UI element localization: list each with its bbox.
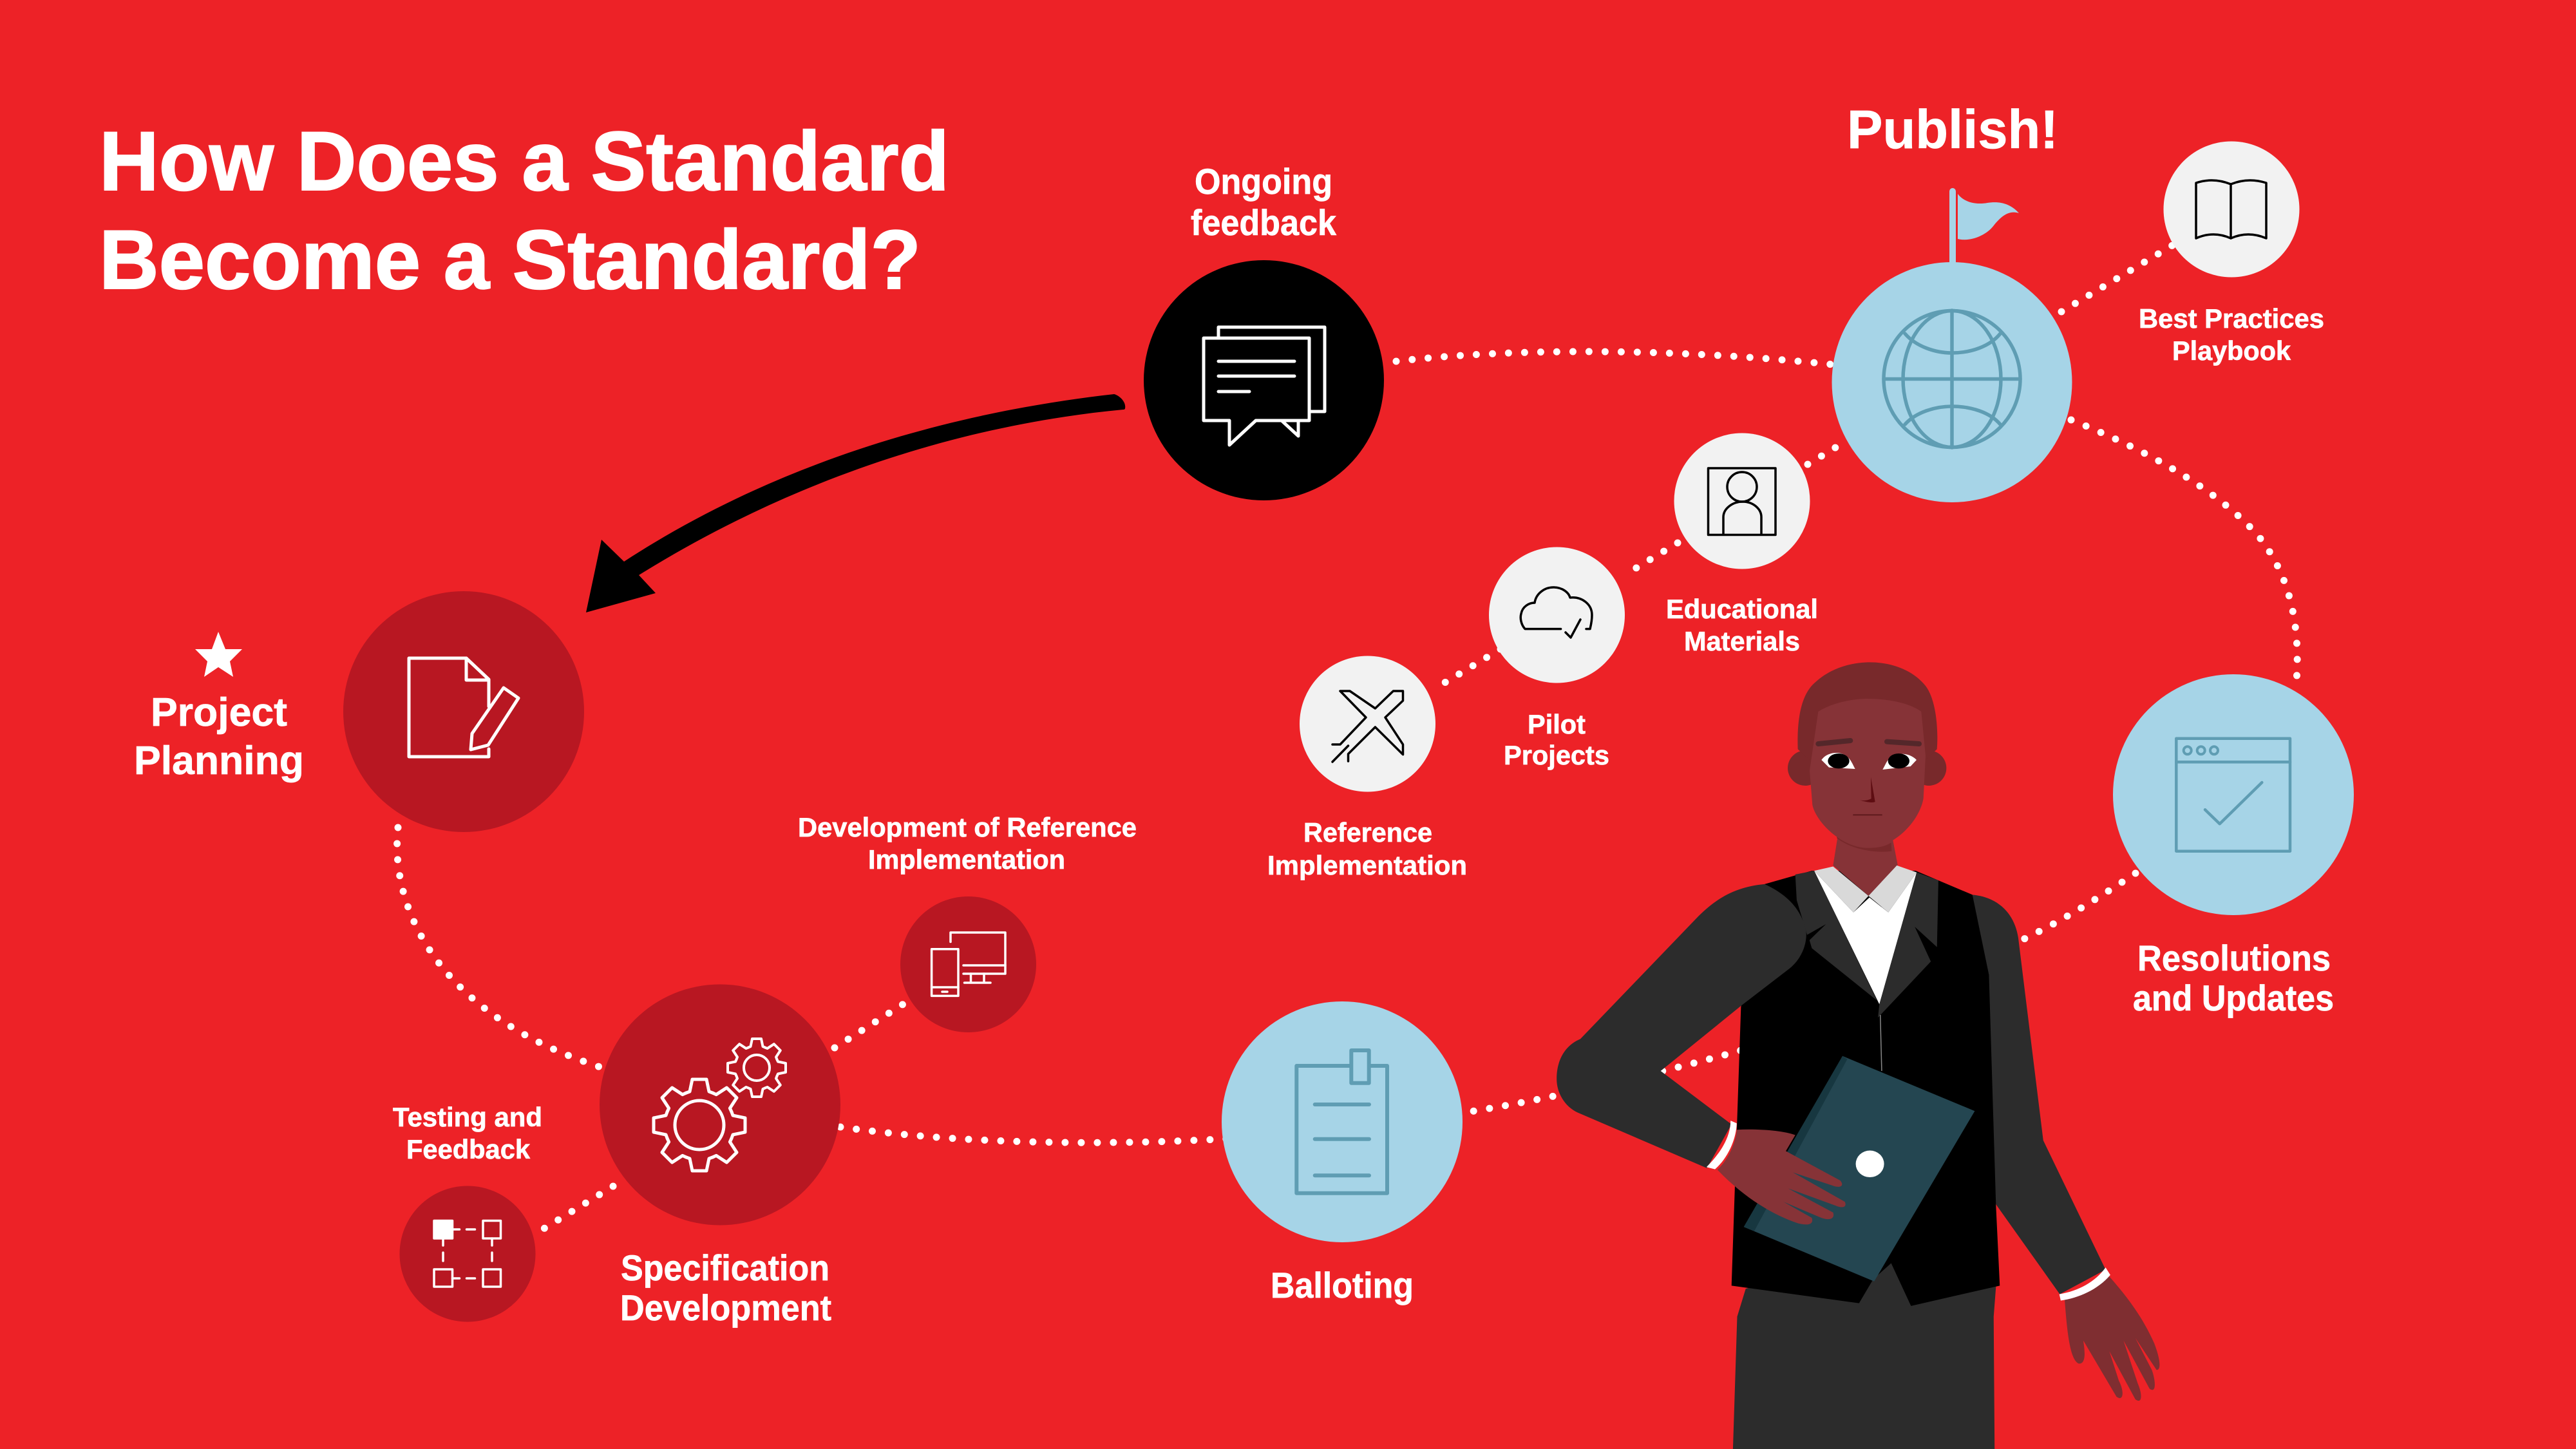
label: reference implementation: Reference [1303,817,1432,848]
label: pilot projects [1504,709,1609,770]
icon: browser window with check [2176,739,2290,851]
label: development of reference implementation: Development of Reference [798,812,1137,842]
label: project planning [134,690,304,783]
label: educational materials: Materials [1684,626,1800,656]
label: project planning: Project [151,690,287,735]
label: ongoing feedback: Ongoing [1195,161,1332,202]
shirt [1814,871,1917,1004]
hair [1797,662,1937,760]
icon: clipboard [1296,1050,1387,1193]
icon: large gear [654,1079,745,1171]
panel: specification development [600,984,840,1225]
label: publish: Publish! [1847,99,2058,160]
eyebrows [1818,741,1919,744]
label: specification development: Specification [621,1247,829,1288]
label: best practices playbook [2139,303,2324,366]
title: How Does a Standard [99,114,949,208]
label: project planning: Planning [134,739,304,783]
panel: resolutions and updates [2113,674,2354,915]
panel: reference implementation [1300,656,1435,792]
label: testing and feedback: Testing and [393,1102,542,1132]
icon: airplane [1332,691,1403,762]
label: balloting: Balloting [1271,1265,1414,1305]
chin shadow [1837,836,1891,852]
title [99,114,949,307]
skirt [1733,1242,1997,1449]
near cuff [1707,1121,1737,1170]
icon: small gear [728,1039,786,1097]
vest [1732,871,2000,1306]
mouth [1853,813,1882,817]
label: best practices playbook: Best Practices [2139,303,2324,334]
label: educational materials: Educational [1666,594,1818,624]
icon: workflow squares [434,1221,501,1287]
illustration: person holding tablet [1557,662,2159,1449]
label: reference implementation [1267,817,1467,880]
dotted process path [397,245,2297,1232]
lapels [1795,871,1877,1001]
icon: document and pencil [409,658,518,757]
panel: balloting [1222,1001,1463,1242]
near hand [1718,1130,1846,1224]
label: reference implementation: Implementation [1267,850,1467,880]
label: ongoing feedback: feedback [1191,202,1337,243]
panel: pilot projects [1489,547,1625,683]
near arm sleeve [1557,884,1806,1168]
nose [1860,777,1875,802]
label: ongoing feedback [1191,161,1337,243]
label: pilot projects: Pilot [1528,709,1586,739]
zip [1880,1015,1882,1071]
neck [1833,836,1898,896]
panel: development of reference implementation [900,896,1036,1032]
far arm sleeve [1973,895,2106,1294]
label: development of reference implementation: Implementation [868,844,1065,875]
label: resolutions and updates: and Updates [2133,978,2334,1018]
panel: project planning [343,591,584,832]
panel: educational materials [1674,433,1810,569]
ears [1788,750,1823,786]
icon: monitor and phone [932,933,1005,996]
panel: best practices playbook [2164,142,2299,277]
label: best practices playbook: Playbook [2172,336,2291,366]
tablet [1744,1056,1975,1282]
icon: speech bubbles [1204,327,1325,445]
label: development of reference implementation [798,812,1137,875]
label: educational materials [1666,594,1818,656]
label: testing and feedback [393,1102,542,1164]
icon: person portrait [1708,468,1776,535]
head [1788,662,1946,852]
icon: star [195,632,242,677]
label: resolutions and updates [2133,938,2334,1018]
panel: testing and feedback [399,1186,536,1321]
body [1557,836,2159,1449]
label: specification development: Development [620,1287,831,1328]
eyes [1821,753,1855,769]
icon: globe [1884,310,2020,448]
panel: publish globe with flag [1832,188,2072,502]
icon: cloud with check [1520,587,1592,638]
panel: ongoing feedback [1144,260,1384,500]
label: testing and feedback: Feedback [406,1134,531,1164]
label: specification development [620,1247,831,1328]
collar [1814,866,1917,913]
far hand [2065,1276,2159,1401]
far cuff [2060,1267,2110,1301]
icon: open book [2196,180,2266,238]
face [1810,699,1926,848]
arrow: feedback back to project planning [586,394,1125,612]
title: Become a Standard? [99,213,921,307]
label: resolutions and updates: Resolutions [2137,938,2331,978]
label: pilot projects: Projects [1504,740,1609,770]
